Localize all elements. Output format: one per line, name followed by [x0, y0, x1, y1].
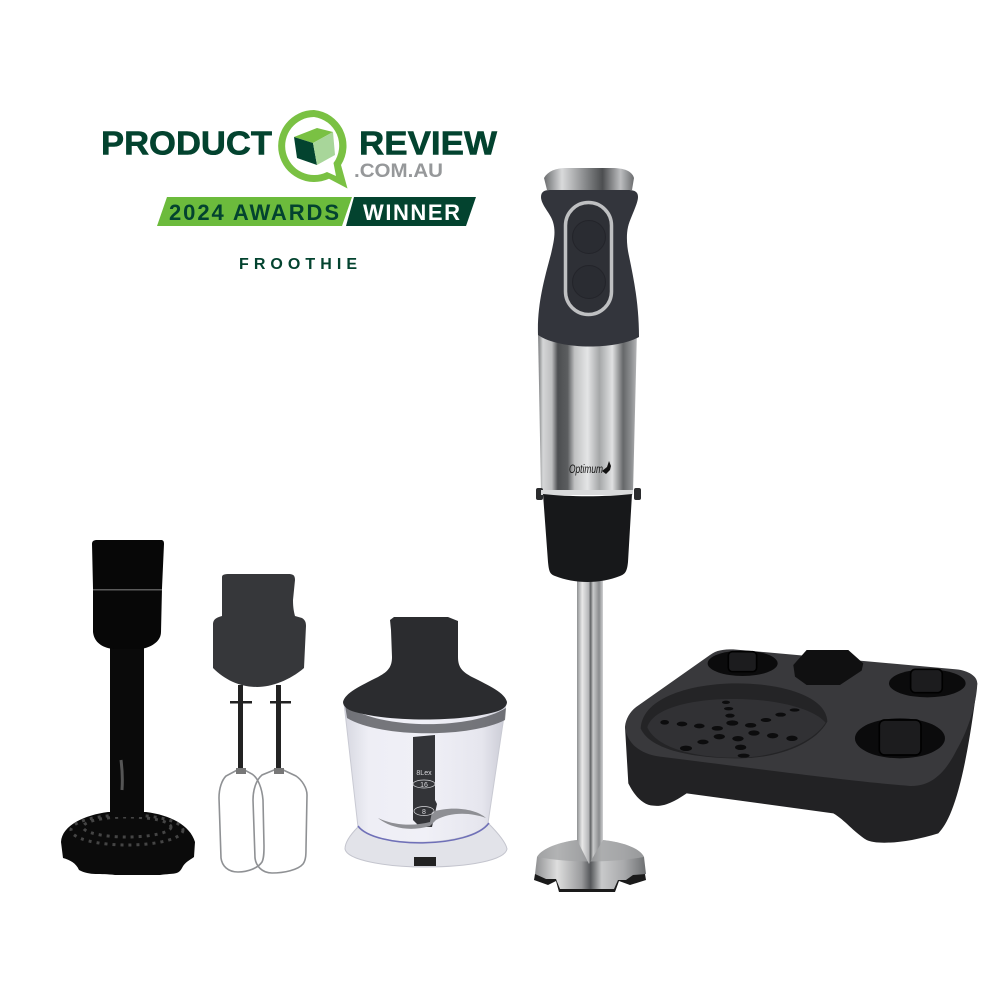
capacity markings: 8Lex [416, 770, 432, 777]
storage tray [625, 649, 977, 843]
logo word: REVIEW: REVIEW [359, 124, 498, 162]
masher base [61, 812, 195, 875]
draining dish [641, 683, 827, 758]
capacity markings [413, 770, 435, 816]
chopper blade [378, 809, 486, 829]
control panel [566, 202, 612, 314]
award logo [101, 110, 498, 273]
chopper lid [343, 617, 507, 720]
masher attachment [61, 540, 195, 875]
banner: winner: WINNER [363, 200, 460, 225]
black collar [543, 494, 632, 582]
beater wires [219, 768, 307, 873]
turbo button [572, 266, 606, 298]
masher shaft [110, 645, 144, 817]
blender foot [534, 840, 646, 892]
cup: back left [708, 651, 778, 676]
bowl band [345, 705, 506, 733]
logo word: PRODUCT: PRODUCT [101, 124, 272, 162]
banner: winner [346, 197, 476, 226]
stick blender [534, 168, 646, 892]
cup: octagon centre [793, 650, 863, 685]
metal body [538, 330, 637, 493]
tray top surface [625, 649, 977, 786]
beater attachment [213, 574, 307, 873]
chrome ring [541, 490, 633, 495]
capacity markings: 8 [422, 809, 426, 816]
logo icon: speech bubble with cube [278, 110, 348, 188]
brand name: FROOTHIE: FROOTHIE [239, 256, 357, 273]
logo word: .COM.AU: .COM.AU [354, 160, 443, 182]
chopper base tab [414, 857, 436, 866]
drain holes [660, 701, 800, 758]
power button [572, 220, 606, 254]
blue ring [358, 823, 489, 843]
banner: 2024 awards: 2024 AWARDS [169, 200, 339, 225]
chopper stem [413, 735, 437, 827]
chopper base [345, 823, 507, 867]
brand script: Optimum [569, 462, 603, 476]
head seam [93, 589, 162, 590]
chopper bowl [344, 703, 506, 842]
rubber handle [538, 190, 639, 347]
chopper attachment [343, 617, 507, 867]
beater housing [213, 574, 306, 687]
masher head [92, 540, 164, 649]
side clips [536, 488, 641, 500]
beater rods [230, 685, 291, 774]
cup: front [855, 718, 945, 758]
tray side wall [625, 683, 977, 843]
capacity markings: 16 [420, 782, 428, 789]
blender shaft [577, 578, 603, 848]
shaft highlight [121, 760, 122, 790]
cup: right [889, 669, 966, 697]
top metal cap [544, 168, 634, 190]
